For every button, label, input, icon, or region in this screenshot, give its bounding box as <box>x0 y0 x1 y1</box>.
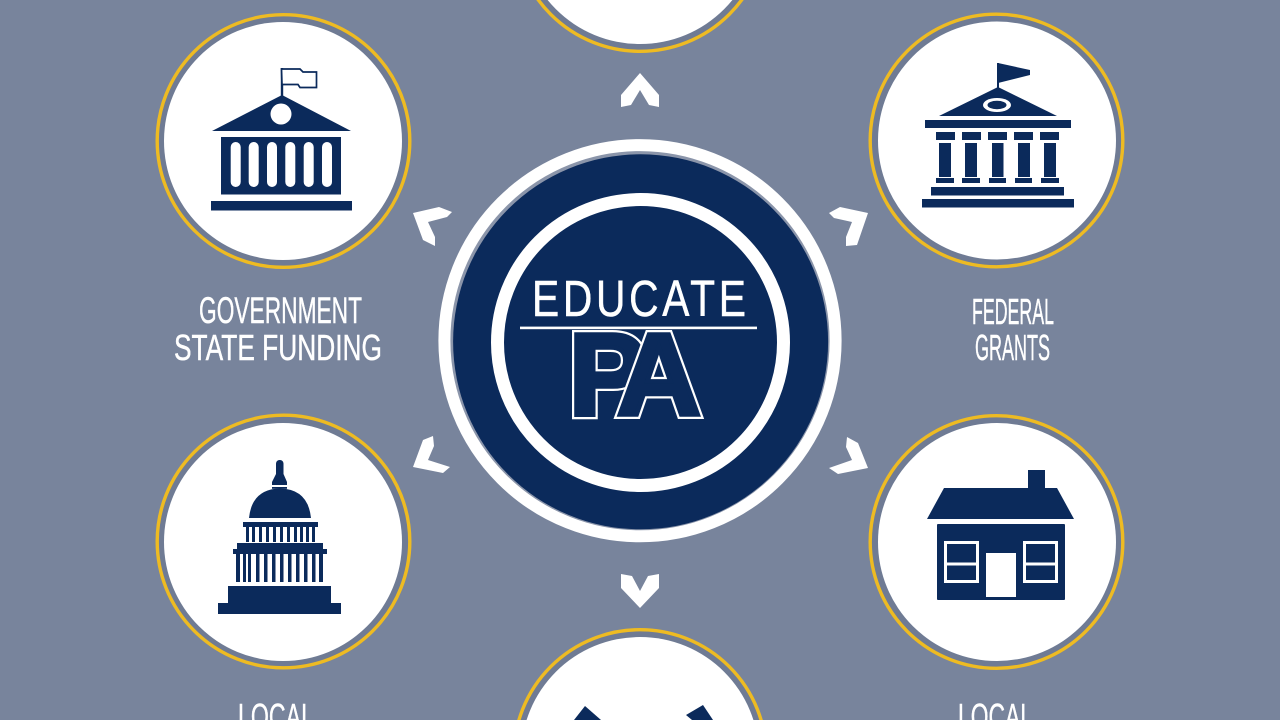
badge inner white ring <box>498 200 784 486</box>
wordmark: outlined PA monogram <box>569 310 701 440</box>
wordmark: outlined PA monogram: A <box>617 310 701 440</box>
wordmark: outlined PA monogram: P <box>569 310 646 440</box>
node ring <box>157 15 410 267</box>
label: government state funding: STATE FUNDING <box>174 327 382 368</box>
top node (cropped) <box>514 0 766 51</box>
wordmark: outlined PA monogram: A <box>617 310 701 440</box>
node: state funding building <box>157 15 410 267</box>
wordmark: EDUCATE: EDUCATE <box>532 270 750 327</box>
node ring <box>870 416 1123 668</box>
icon: government building with outlined flag <box>211 68 352 210</box>
node: federal grants building <box>870 14 1123 267</box>
text: FEDERAL <box>972 291 1054 332</box>
badge navy disc <box>453 154 828 529</box>
chevron: down <box>621 574 659 608</box>
chevron: lower left <box>413 436 450 473</box>
node ring <box>870 14 1123 267</box>
label: federal grants <box>972 291 1054 368</box>
node: house <box>870 416 1123 668</box>
bottom node (cropped) <box>514 630 766 720</box>
label: government state funding: GOVERNMENT <box>199 290 362 331</box>
chevron: upper right <box>829 207 868 246</box>
wordmark: outlined PA monogram: P <box>569 310 646 440</box>
label: federal grants: GRANTS <box>975 327 1050 368</box>
icon: capitol dome <box>218 460 341 614</box>
icon: cropped roof pieces <box>574 705 713 720</box>
direction chevrons <box>413 73 868 608</box>
central logo badge <box>444 145 836 536</box>
icon: columned building with solid flag <box>922 63 1074 208</box>
node: capitol <box>157 415 410 668</box>
icon: house <box>927 470 1074 600</box>
label: government state funding <box>174 290 382 368</box>
chevron: upper left <box>413 207 452 246</box>
badge outer white ring <box>444 145 836 536</box>
chevron: up <box>621 73 659 107</box>
wordmark divider line <box>520 327 757 329</box>
node ring <box>157 415 410 668</box>
chevron: lower right <box>829 437 868 474</box>
